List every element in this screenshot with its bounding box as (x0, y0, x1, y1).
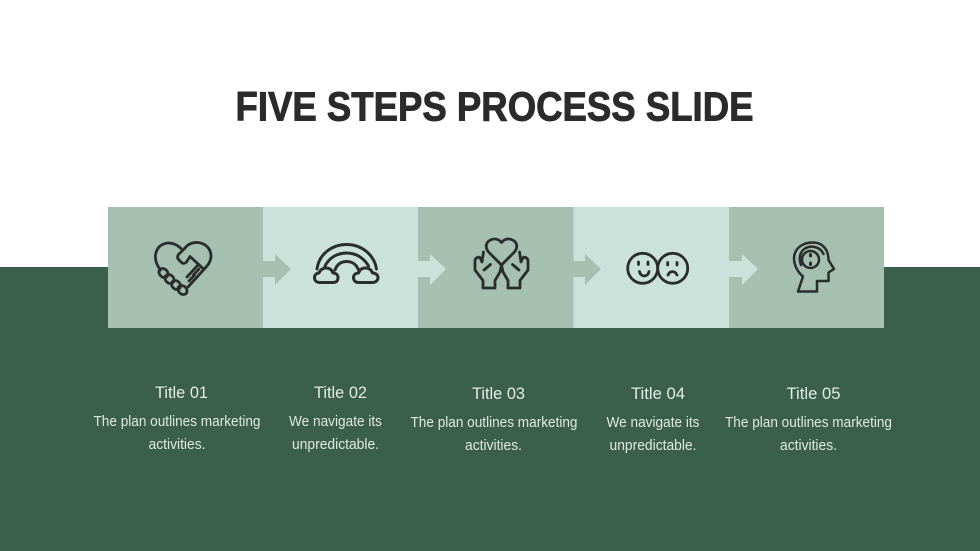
step 3 title: Title 03 (472, 385, 525, 403)
step 2 body: We navigate its (289, 414, 382, 430)
step 2 body (289, 414, 382, 453)
step 5 body (725, 415, 892, 454)
arrow: step 3 to 4 (574, 254, 601, 285)
panel: step 5 (729, 207, 884, 328)
step 1 title: Title 01 (155, 384, 208, 402)
step 5 body: activities. (780, 438, 837, 454)
icon: hands holding heart (475, 239, 528, 288)
panel: step 4 (574, 207, 729, 328)
step 4 body: unpredictable. (610, 438, 696, 454)
panel: step 1 (108, 207, 263, 328)
step 3 body (410, 415, 578, 454)
step 5 title: Title 05 (786, 385, 840, 403)
step 3 body: activities. (465, 438, 522, 454)
text block: step 5 (725, 385, 892, 454)
step 2 body: unpredictable. (292, 437, 379, 453)
panel: step 2 (263, 207, 418, 328)
step 3 body: The plan outlines marketing (410, 415, 578, 431)
arrow: step 2 to 3 (418, 254, 446, 285)
arrow: step 4 to 5 (729, 254, 758, 285)
icon: head with exclamation (794, 242, 834, 292)
step 1 body: The plan outlines marketing (94, 414, 260, 430)
step 2 title: Title 02 (314, 384, 367, 402)
icon: happy and sad faces (628, 253, 688, 283)
text block: step 2 (289, 384, 382, 453)
step 4 body: We navigate its (606, 415, 700, 431)
text block: step 3 (410, 385, 578, 454)
step 5 body: The plan outlines marketing (725, 415, 892, 431)
step 4 body (606, 415, 700, 454)
panel: step 3 (418, 207, 574, 328)
icon: heart handshake (155, 242, 211, 296)
text block: step 1 (94, 384, 260, 453)
icon: rainbow (314, 244, 378, 282)
step 1 body (94, 414, 260, 453)
arrow: step 1 to 2 (263, 254, 291, 285)
step 1 body: activities. (148, 437, 206, 453)
step 4 title: Title 04 (631, 385, 685, 403)
title: FIVE STEPS PROCESS SLIDE (236, 84, 754, 130)
dark green background band (0, 267, 980, 551)
text block: step 4 (606, 385, 700, 454)
